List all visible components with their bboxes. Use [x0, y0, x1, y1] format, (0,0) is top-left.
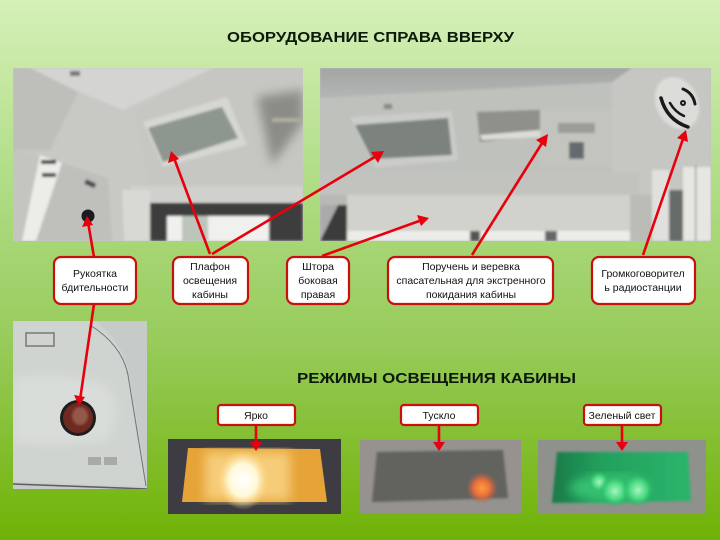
- label: radio loudspeaker: Громкоговорител: [601, 268, 685, 280]
- label: green light: Зеленый свет: [589, 410, 656, 422]
- photo: cab ceiling right: [320, 68, 711, 241]
- icon: speaker grille: [661, 89, 695, 127]
- label: cab light: Плафон: [190, 261, 230, 273]
- photo: vigilance handle close-up: [13, 321, 147, 489]
- label: side blind: правая: [301, 289, 335, 301]
- label: cab light: освещения: [183, 275, 237, 287]
- label: radio loudspeaker: ь радиостанции: [604, 282, 682, 294]
- label: dim: [401, 405, 478, 425]
- label: side blind: [287, 257, 349, 304]
- label: handrail and rope: [388, 257, 553, 304]
- label: dim: Тускло: [422, 410, 456, 422]
- label: side blind: боковая: [298, 275, 338, 287]
- title: ОБОРУДОВАНИЕ СПРАВА ВВЕРХУ: [227, 29, 515, 46]
- photo: dim mode lamp: [360, 440, 521, 513]
- photo: cab ceiling left: [13, 68, 303, 241]
- photo: green mode lamp: [538, 440, 706, 513]
- label: cab light: кабины: [192, 289, 228, 301]
- label: vigilance handle: Рукоятка: [73, 268, 117, 280]
- heading: lighting modes: РЕЖИМЫ ОСВЕЩЕНИЯ КАБИНЫ: [297, 370, 576, 387]
- label: vigilance handle: бдительности: [62, 282, 129, 294]
- label: vigilance handle: [54, 257, 136, 304]
- label: side blind: Штора: [302, 261, 334, 273]
- label: green light: [584, 405, 661, 425]
- label: radio loudspeaker: [592, 257, 695, 304]
- label: cab light: [173, 257, 248, 304]
- photo: bright mode lamp: [168, 439, 341, 514]
- label: bright: [218, 405, 295, 425]
- arrows to photos: [74, 130, 688, 451]
- label: handrail and rope: спасательная для экстренного: [396, 275, 546, 287]
- label: bright: Ярко: [244, 410, 268, 422]
- label: handrail and rope: Поручень и веревка: [422, 261, 520, 273]
- label: handrail and rope: покидания кабины: [426, 289, 516, 301]
